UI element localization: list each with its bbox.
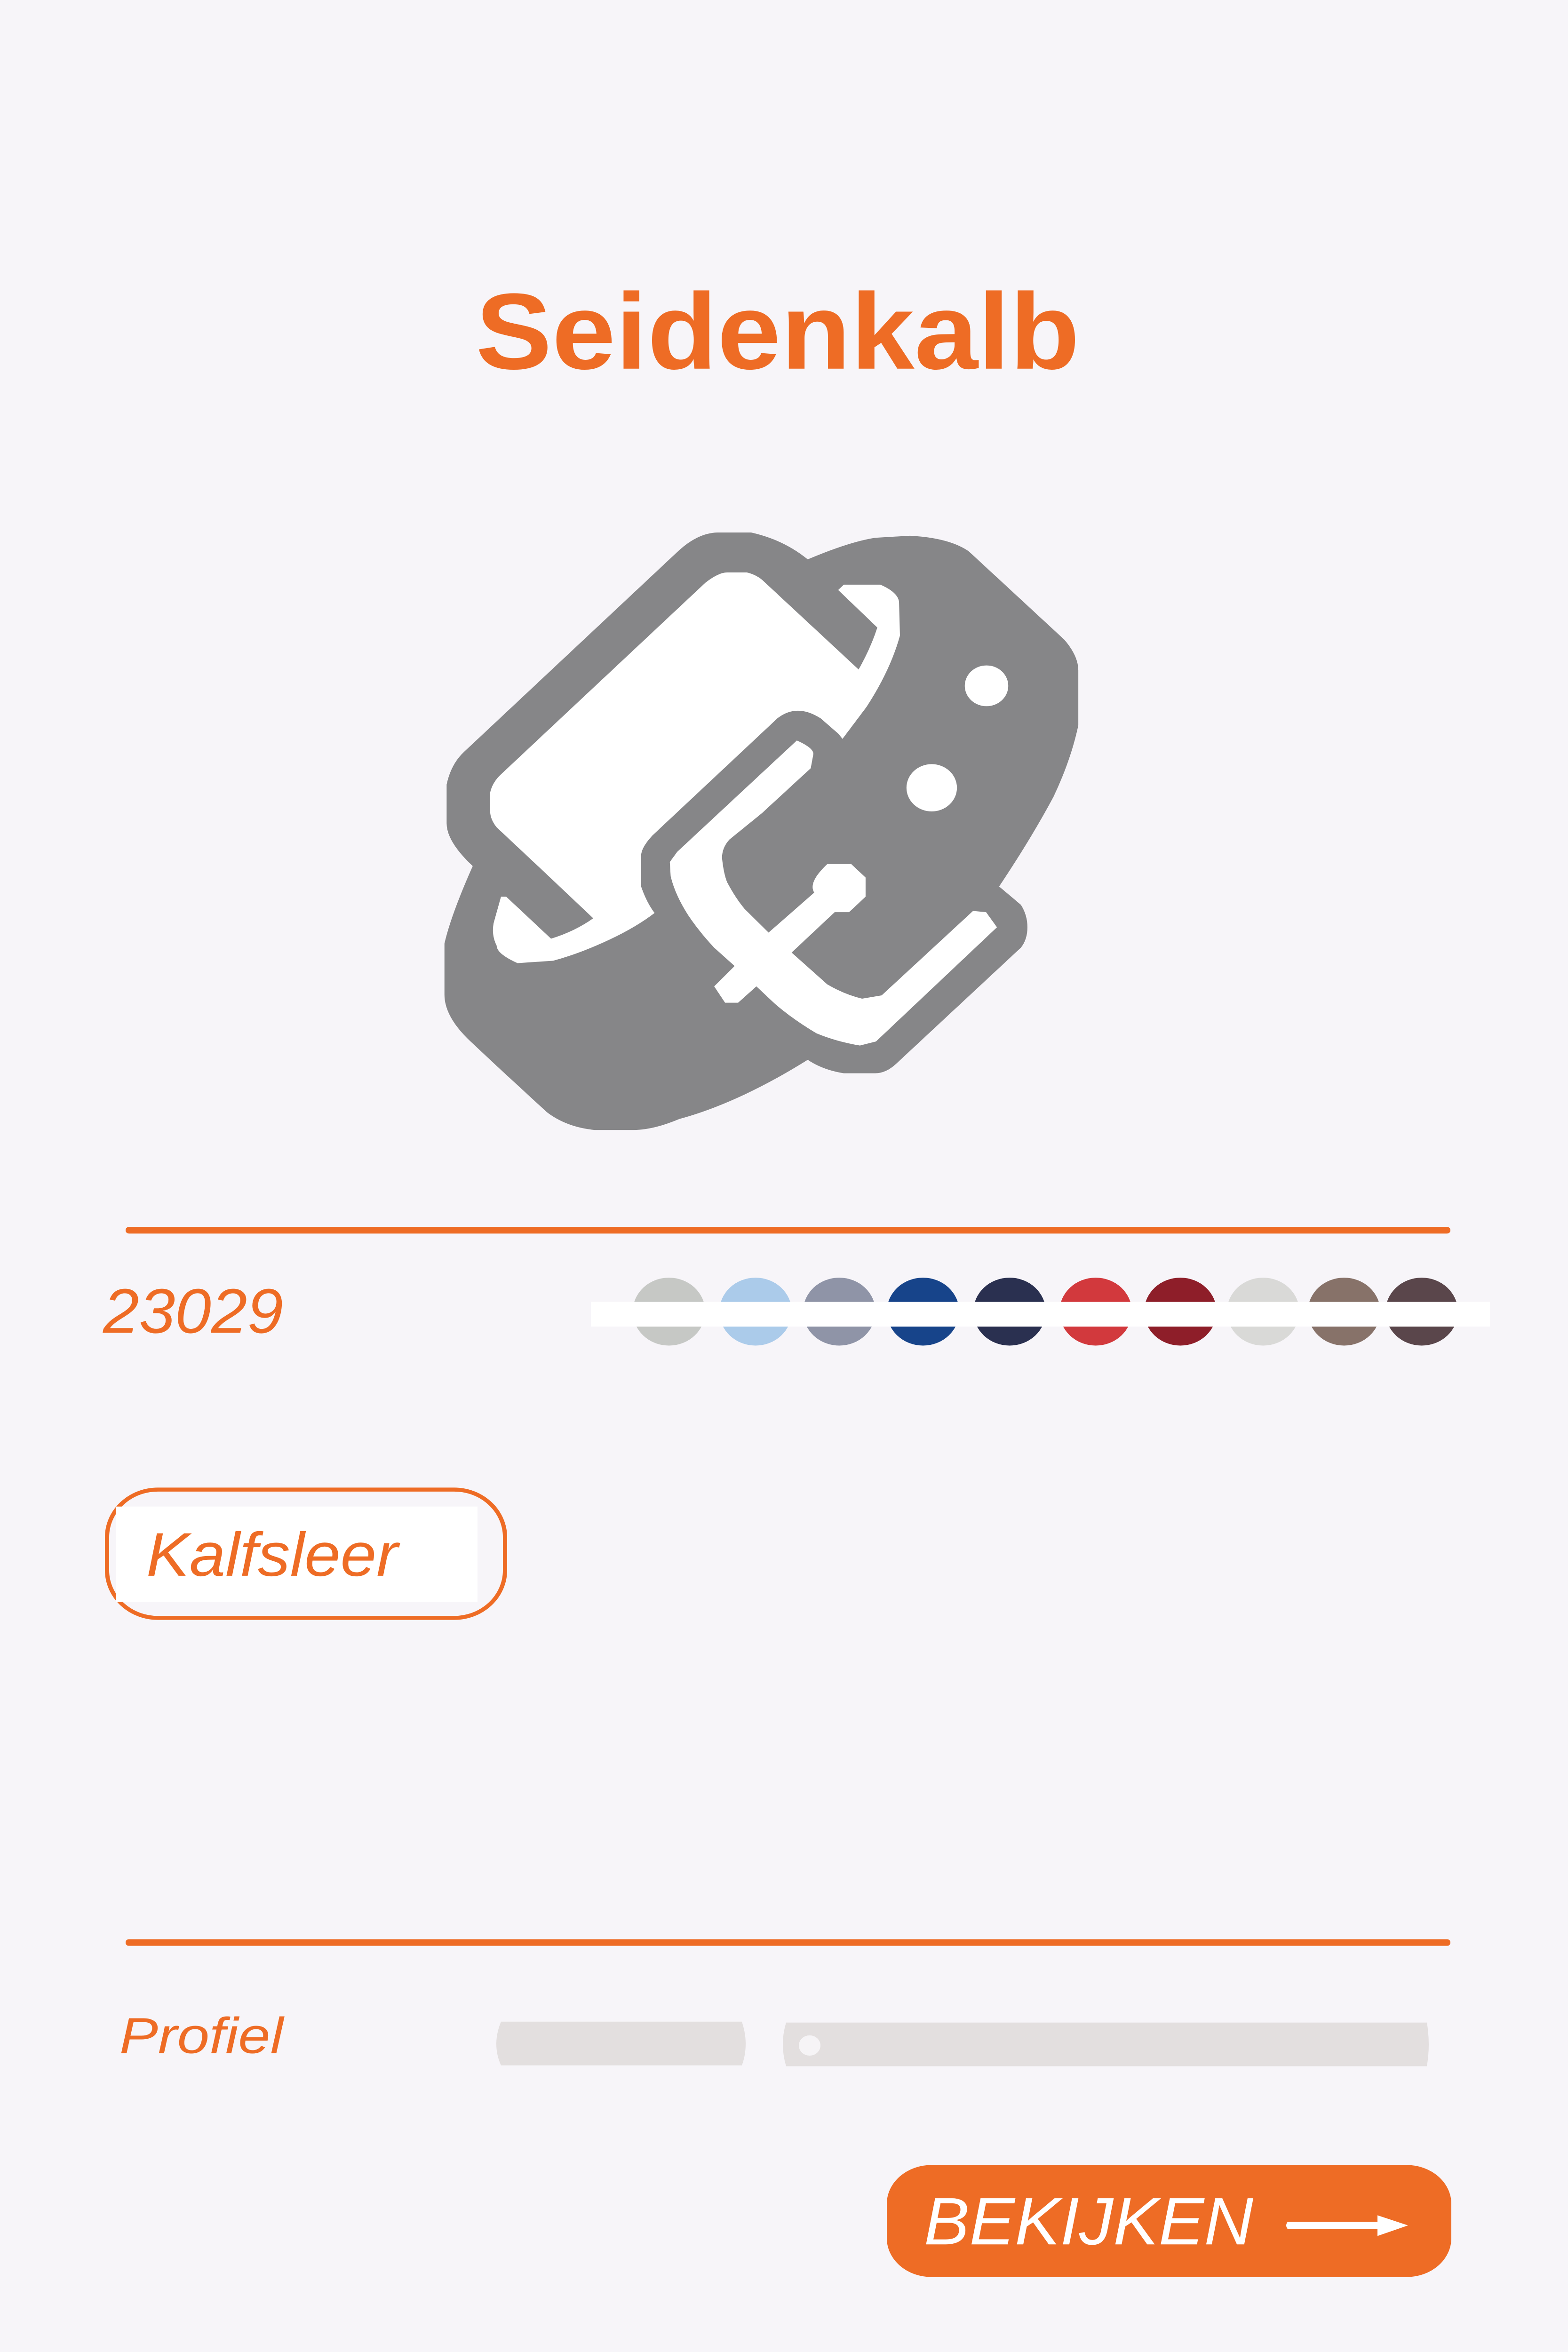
profile shape large [783, 2023, 1429, 2066]
profile shape small [496, 2022, 746, 2066]
icon: leather belt with buckle [445, 532, 1078, 1130]
title: Seidenkalb [476, 271, 1080, 392]
button: BEKIJKEN [924, 2185, 1254, 2259]
material tag: Kalfsleer [146, 1520, 400, 1589]
divider top [126, 1227, 1450, 1233]
belt strap highlight [490, 572, 900, 963]
icon: arrow [1286, 2215, 1408, 2236]
article number: 23029 [103, 1276, 283, 1346]
colour swatches [633, 1278, 1458, 1345]
profile label: Profiel [119, 2007, 285, 2064]
divider bottom [126, 1939, 1450, 1946]
buckle highlight [670, 740, 997, 1046]
button [887, 2165, 1451, 2277]
belt holes [907, 666, 1008, 811]
white band over swatches [591, 1302, 1490, 1327]
material tag [107, 1490, 505, 1618]
